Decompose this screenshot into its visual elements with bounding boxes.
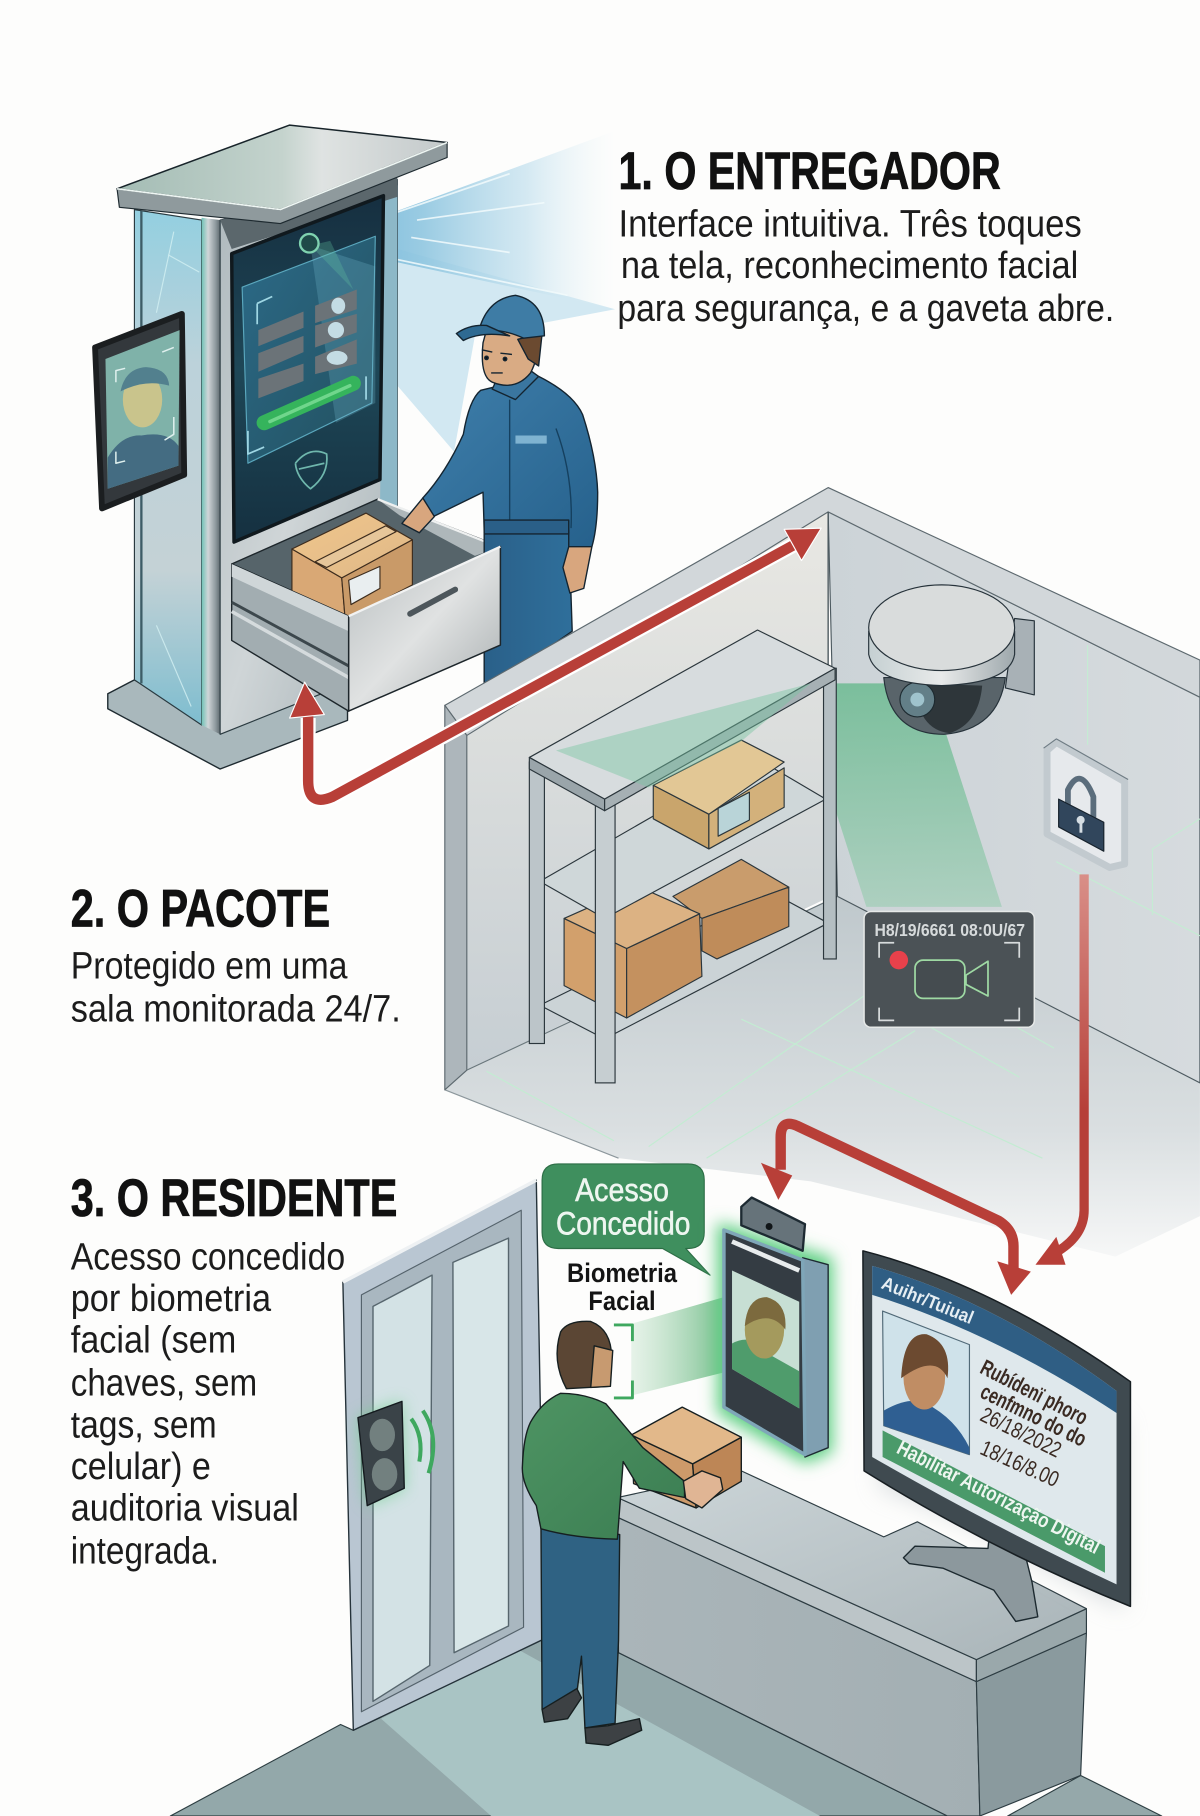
panel: drawer interior [232, 499, 500, 620]
kiosk base [108, 680, 348, 769]
shelf [529, 630, 836, 1083]
text block: step 1 description: na tela, reconhecimento facial [621, 244, 1078, 287]
text block: step 3 description: chaves, sem [71, 1362, 257, 1405]
left wall [467, 512, 828, 1070]
room floor [445, 896, 1200, 1257]
man cap [478, 295, 544, 338]
monitor frame [863, 1251, 1130, 1606]
green scan beam [631, 1297, 724, 1396]
text block: step 2 description: Protegido em uma [71, 945, 348, 988]
heading: 3. O Residente: 3. O RESIDENTE [71, 1169, 397, 1228]
shelf legs [529, 762, 544, 1044]
light beam from kiosk camera [309, 131, 615, 452]
reader camera [741, 1198, 805, 1251]
screen menu rows [258, 290, 357, 398]
green confirm button [264, 383, 353, 423]
panel: storage room [445, 488, 1200, 1257]
resident head [557, 1321, 612, 1389]
package in drawer [292, 513, 412, 620]
record details [976, 1355, 1092, 1492]
record details: cenfmno do do [977, 1379, 1091, 1452]
bubble text [556, 1172, 690, 1242]
text block: step 3 description: tags, sem [71, 1403, 217, 1446]
resident hand [683, 1471, 723, 1508]
panel: access door [343, 1180, 544, 1730]
camera status panel [864, 911, 1034, 1027]
screen logo [295, 451, 327, 489]
figure: delivery man [402, 295, 598, 695]
recording dot [890, 951, 908, 969]
lock panel [1044, 739, 1128, 867]
panel: face reader device [717, 1198, 833, 1464]
text block: step 3 description [71, 1235, 345, 1573]
text block: step 2 description [71, 945, 401, 1030]
resident package [631, 1407, 741, 1508]
man hands [402, 498, 434, 533]
floor light lines [486, 984, 1054, 1158]
text block: step 2 description: sala monitorada 24/7. [71, 988, 401, 1030]
bubble text: Acesso [575, 1172, 669, 1208]
heading: 1. O Entregador: 1. O ENTREGADOR [619, 142, 1001, 201]
text block: step 3 description: Acesso concedido [71, 1235, 345, 1278]
video icon [915, 960, 988, 998]
record details: 18/16/8.00 [977, 1435, 1063, 1492]
text block: step 3 description: por biometria [71, 1277, 272, 1320]
text block: step 3 description: auditoria visual [71, 1487, 299, 1530]
monitor stand [903, 1526, 1038, 1621]
record details: Rubídenï phoro [976, 1355, 1092, 1430]
text block: step 1 description: para segurança, e a gaveta abre. [617, 287, 1114, 330]
drawer handle [410, 590, 455, 614]
panel: delivery kiosk [95, 125, 447, 769]
door reader [358, 1401, 433, 1506]
text block: step 1 description [617, 202, 1114, 330]
man belt [484, 520, 569, 534]
security dome camera [869, 585, 1034, 734]
arrow: kiosk to storage room [290, 528, 821, 800]
monitor screen [872, 1266, 1117, 1584]
panel: lobby floor [170, 1639, 1162, 1816]
record details: 26/18/2022 [977, 1402, 1066, 1462]
wall end face [445, 705, 467, 1090]
label: facial biometrics: Facial [588, 1286, 656, 1316]
kiosk camera [300, 234, 319, 252]
man jacket [423, 376, 598, 547]
man neck and head [482, 330, 538, 385]
digital authorization bar: Habilitar Autorização Digital [893, 1436, 1104, 1559]
text block: step 3 description: integrada. [71, 1530, 219, 1573]
resident shoes [542, 1689, 581, 1722]
panel: counter [617, 1471, 1086, 1816]
panel: drawer front and rails [232, 547, 500, 711]
text block: step 3 description: facial (sem [71, 1319, 236, 1362]
kiosk front face [220, 180, 397, 734]
panel: audit monitor: Auihr/Tuiual [879, 1272, 977, 1328]
reader face image [732, 1340, 799, 1408]
surveillance green cone [828, 683, 1002, 907]
monitor header bar [872, 1266, 1117, 1413]
label: facial biometrics: Biometria [567, 1258, 677, 1288]
figure: resident [522, 1321, 741, 1745]
right wall [828, 512, 1200, 1083]
label: facial biometrics [567, 1258, 677, 1316]
text block: step 3 description: celular) e [71, 1445, 211, 1488]
access granted speech bubble [542, 1164, 710, 1275]
upper box [653, 740, 784, 849]
man trousers [484, 528, 572, 695]
text block: step 1 description: Interface intuitiva. Três toques [619, 202, 1082, 245]
wall tablet [95, 314, 184, 508]
arrow: two-way to reader and monitor [761, 1124, 1031, 1295]
wall rim [445, 488, 1200, 735]
arrow: lock to monitor [1035, 874, 1084, 1265]
kiosk glass side [134, 210, 202, 725]
resident photo [883, 1311, 969, 1455]
panel timestamp: H8/19/6661 08:0U/67 [874, 920, 1025, 940]
door glass panes [373, 1275, 432, 1701]
bubble text: Concedido [556, 1206, 690, 1242]
resident sweater [522, 1393, 685, 1539]
resident trousers [541, 1520, 620, 1728]
lower boxes [564, 859, 789, 1018]
heading: 2. O Pacote: 2. O PACOTE [71, 880, 330, 939]
panel: audit monitor [863, 1251, 1130, 1621]
face scan brackets [614, 1325, 632, 1398]
kiosk roof [117, 142, 447, 224]
kiosk screen [232, 196, 383, 542]
